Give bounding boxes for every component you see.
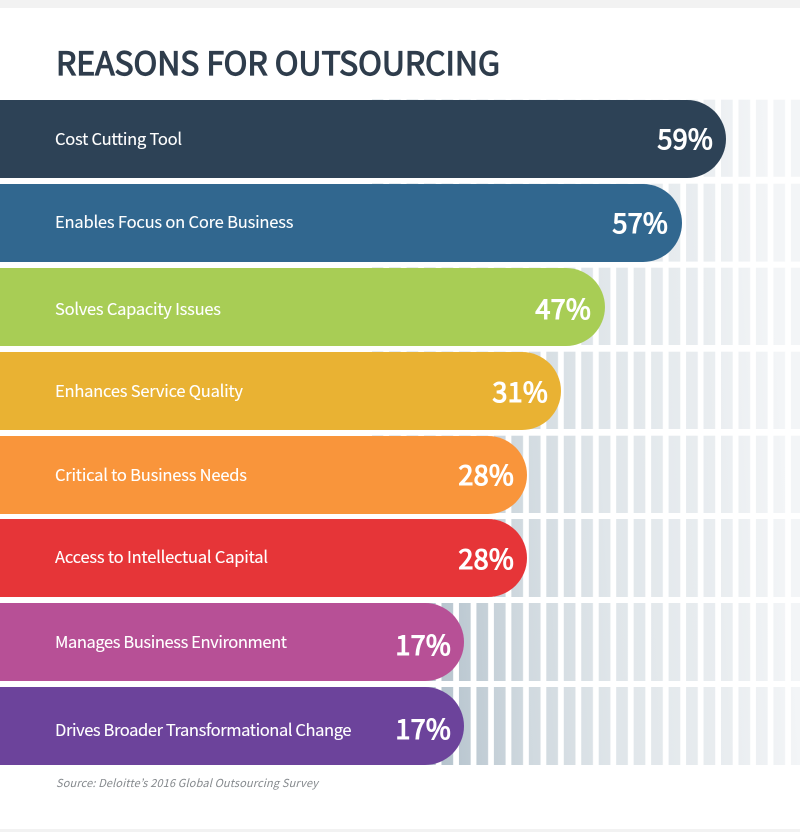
- label: Enhances Service Quality: [55, 378, 243, 402]
- label: Enables Focus on Core Business: [55, 209, 294, 233]
- label: Cost Cutting Tool: [55, 126, 182, 150]
- bar: Manages Business Environment 17%: [0, 603, 464, 681]
- bar: Enhances Service Quality 31%: [0, 352, 561, 430]
- title: REASONS FOR OUTSOURCING: [56, 39, 500, 85]
- bar: Critical to Business Needs 28%: [0, 436, 527, 514]
- label: Manages Business Environment: [55, 629, 287, 653]
- value: 47%: [535, 288, 591, 327]
- label: Drives Broader Transformational Change: [55, 717, 352, 741]
- value: 17%: [395, 708, 451, 747]
- bar: Drives Broader Transformational Change 17%: [0, 687, 464, 765]
- value: 59%: [657, 118, 713, 157]
- value: 57%: [612, 202, 668, 241]
- bar: Enables Focus on Core Business 57%: [0, 184, 682, 262]
- value: 28%: [458, 454, 514, 493]
- value: 31%: [492, 371, 548, 410]
- striped background grid: [371, 95, 800, 770]
- bar: Access to Intellectual Capital 28%: [0, 519, 527, 597]
- bar: Solves Capacity Issues 47%: [0, 268, 605, 346]
- label: Access to Intellectual Capital: [55, 544, 268, 568]
- bottom page band: [0, 829, 800, 832]
- value: 17%: [395, 624, 451, 663]
- top page band: [0, 0, 800, 8]
- source note: Source: Deloitte’s 2016 Global Outsourcing Survey: [56, 775, 320, 791]
- label: Critical to Business Needs: [55, 462, 247, 486]
- value: 28%: [458, 538, 514, 577]
- label: Solves Capacity Issues: [55, 296, 221, 320]
- bar: Cost Cutting Tool 59%: [0, 100, 726, 178]
